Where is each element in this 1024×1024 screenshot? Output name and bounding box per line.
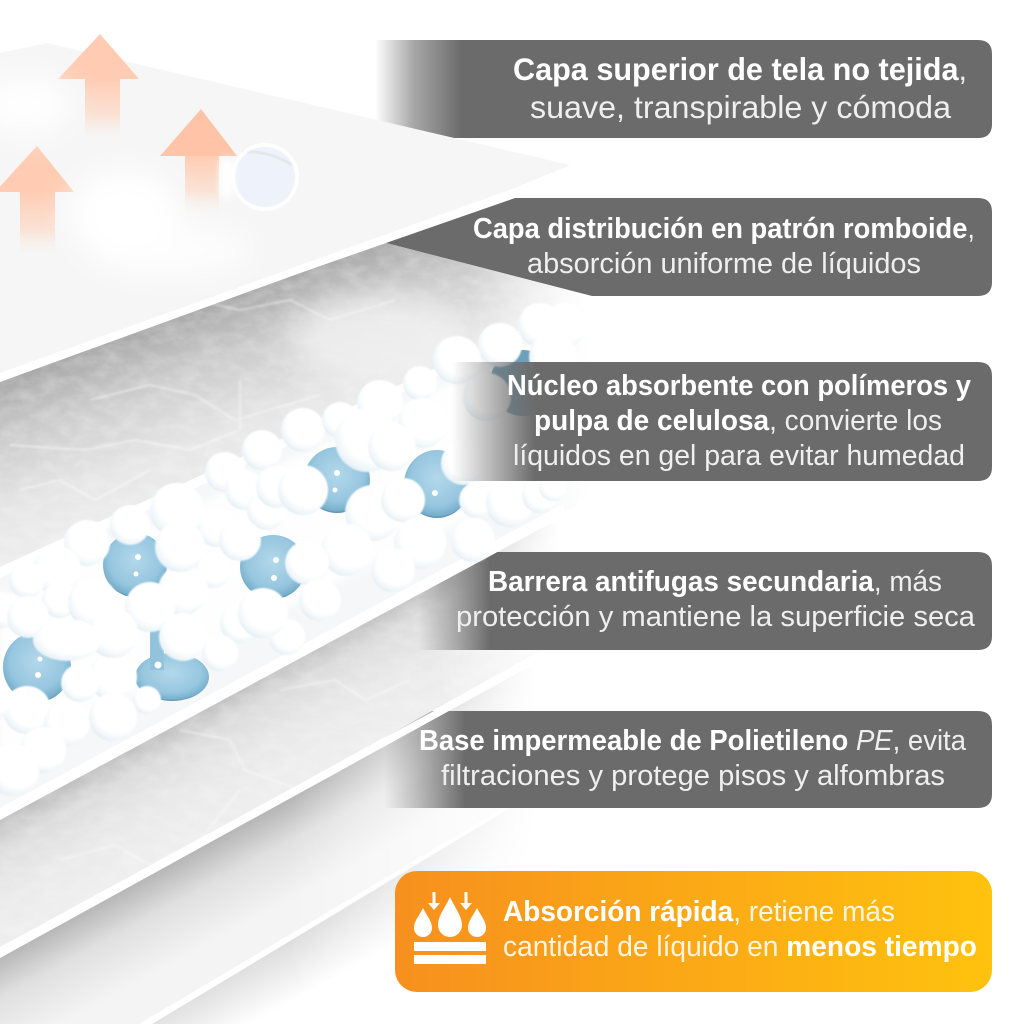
banner: capa superior background [375,40,992,138]
text: base impermeable [419,725,966,792]
core: white carrier sheet [0,331,534,808]
layer: distribution sheet [0,243,592,578]
core: absorbent band with polymers [0,298,592,820]
arrow: vapour up left-bottom [0,146,74,254]
icon: drops and layers [414,892,486,964]
text: capa superior [513,51,967,125]
text: base impermeable: filtraciones y protege pisos y alfombras [441,760,945,792]
text: absorcion: cantidad de líquido en menos tiempo [503,931,977,963]
text: capa distribucion [473,213,975,280]
text: capa distribucion: absorción uniforme de líquidos [527,248,921,280]
arrow: vapour up left-top [58,34,139,139]
arrow: vapour up right [160,109,237,214]
text: capa distribucion: Capa distribución en patrón romboide, [473,213,975,245]
layer: bottom sheet shadow [152,826,482,1024]
text: nucleo absorbente [507,370,971,472]
banner: capa distribucion background [386,198,992,296]
text: absorcion [503,896,977,963]
core: blue gel drops [3,350,556,702]
text: barrera antifugas: Barrera antifugas secundaria, más [488,566,942,598]
layer: secondary barrier [0,529,540,958]
text: barrera antifugas: protección y mantiene la superficie seca [456,601,975,633]
mist clouds [0,75,250,276]
text: nucleo absorbente: Núcleo absorbente con polímeros y [507,370,971,402]
layer: polyethylene base [0,679,508,1024]
bubble [220,145,297,209]
text: barrera antifugas [456,566,975,633]
text: absorcion: Absorción rápida, retiene más [503,896,895,928]
banner: base impermeable background [384,711,992,808]
text: capa superior: Capa superior de tela no tejida, [513,51,967,87]
banner: barrera antifugas background [418,552,992,650]
core: pale fill under balls [0,330,570,770]
layer: top non-woven sheet [0,34,570,382]
callout: absorcion rapida [395,871,992,992]
text: base impermeable: Base impermeable de Polietileno PE, evita [419,725,966,757]
text: capa superior: suave, transpirable y cómoda [530,89,951,125]
banner: nucleo absorbente background [452,362,992,481]
text: nucleo absorbente: pulpa de celulosa, convierte los [534,405,942,437]
text: nucleo absorbente: líquidos en gel para evitar humedad [513,440,965,472]
core: white cellulose balls [0,303,587,796]
